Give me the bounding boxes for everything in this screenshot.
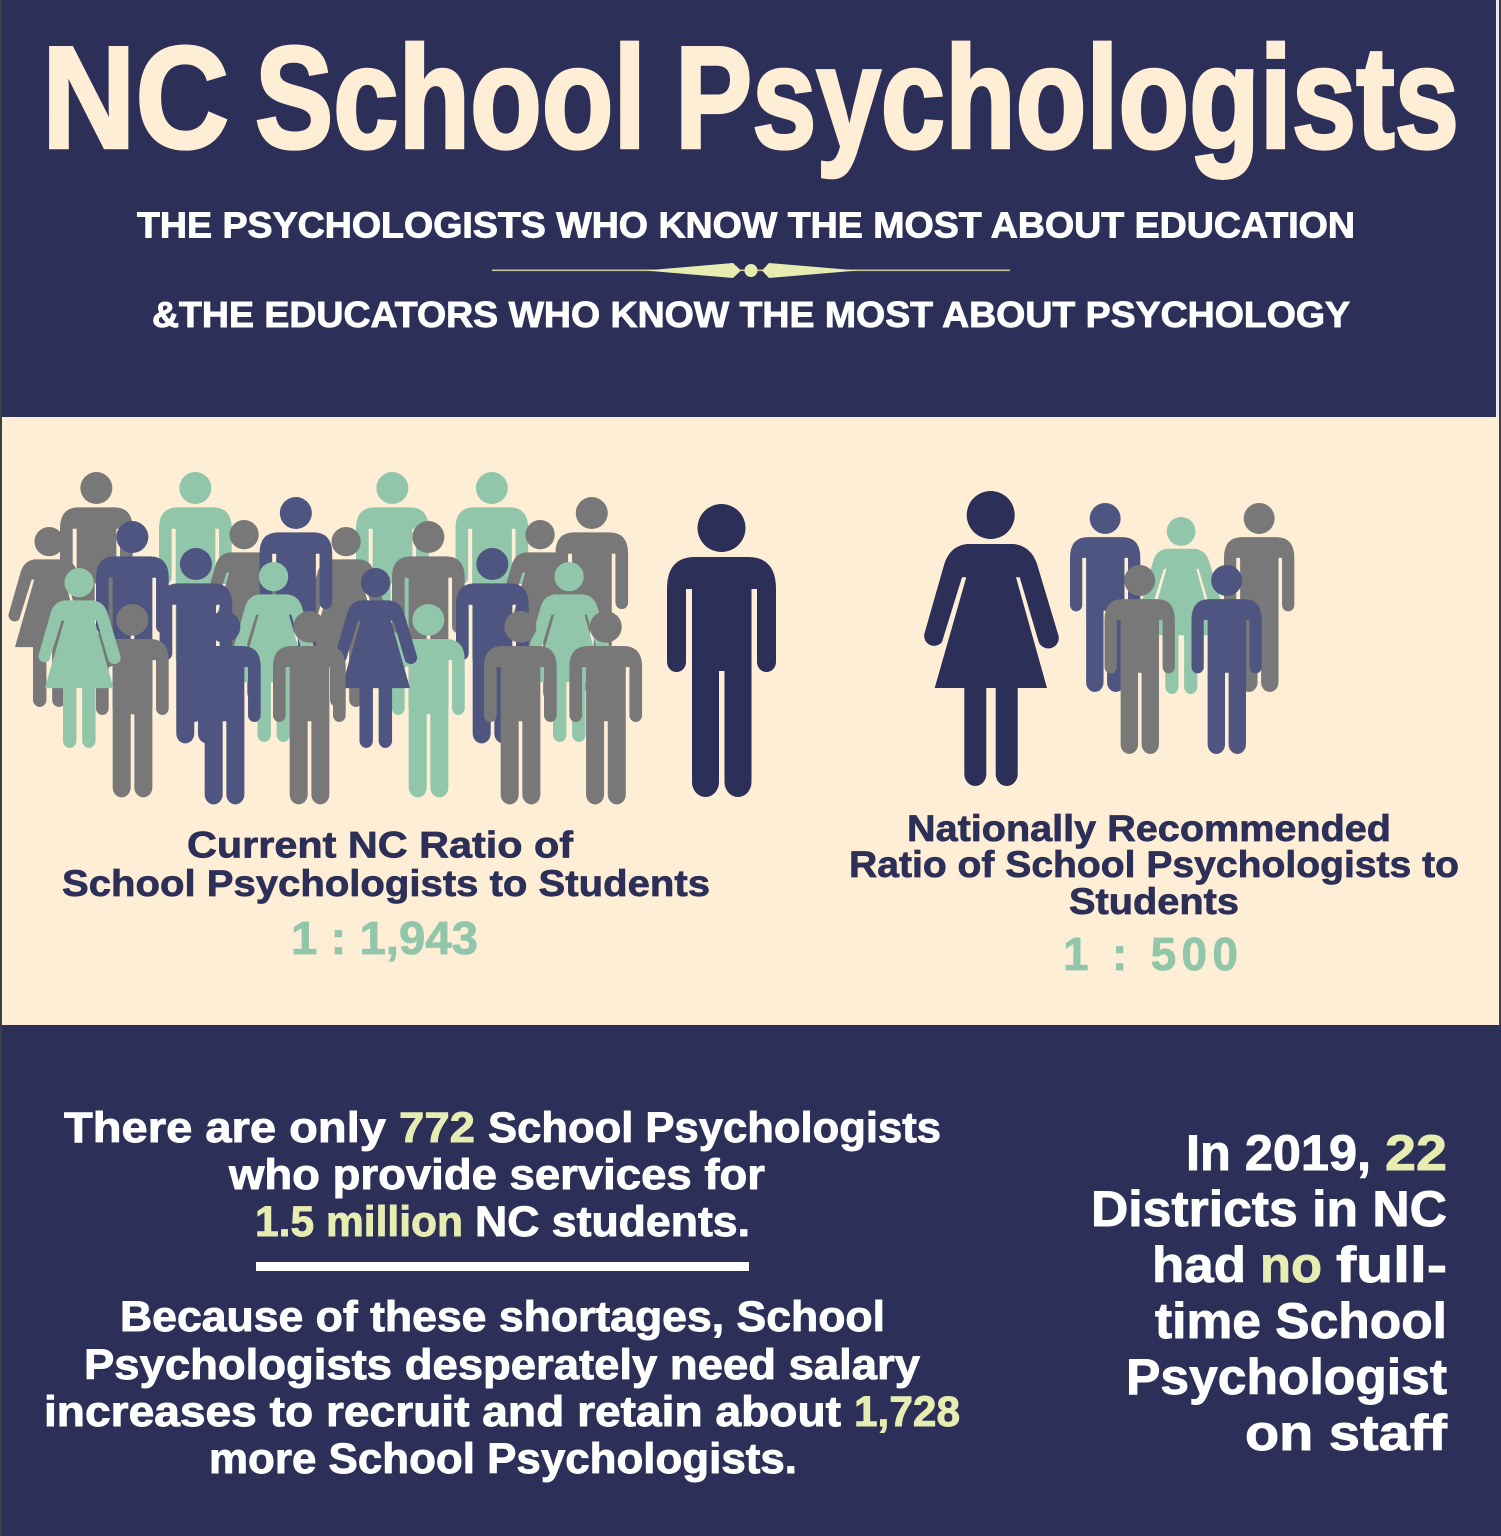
text block: salary need: more School Psychologists. — [209, 1435, 797, 1483]
panel: ratio comparison background — [0, 417, 1499, 1025]
title: School — [255, 16, 646, 178]
text block: psychologist count: NC students. — [475, 1198, 750, 1246]
ornamental divider — [492, 263, 1010, 278]
heading: nationally recommended ratio: Ratio of School Psychologists to — [849, 844, 1459, 885]
text block: psychologist count: 1.5 million — [255, 1198, 463, 1246]
panel: statistics background — [0, 1025, 1501, 1536]
title — [42, 16, 1459, 178]
text block: psychologist count: 772 — [399, 1104, 475, 1152]
text block: districts without staff: In 2019, — [1186, 1125, 1371, 1181]
text block: salary need: Psychologists desperately need salary — [84, 1341, 920, 1389]
text block: districts without staff — [1091, 1125, 1447, 1461]
stat: current ratio: 1 : 1,943 — [291, 912, 478, 964]
text block: districts without staff: time School — [1155, 1293, 1447, 1349]
text block: psychologist count — [64, 1104, 941, 1246]
stat: recommended ratio: 1 : 500 — [1063, 928, 1238, 980]
heading: current NC ratio: Current NC Ratio of — [187, 824, 574, 866]
heading: current NC ratio — [62, 824, 710, 904]
text block: psychologist count: School Psychologists — [488, 1104, 941, 1152]
text block: salary need: 1,728 — [854, 1388, 960, 1436]
text block: psychologist count: There are only — [64, 1104, 386, 1152]
icon: crowd of students, current NC ratio — [8, 472, 642, 804]
subtitle line two: &THE EDUCATORS WHO KNOW THE MOST ABOUT PSYCHOLOGY — [152, 294, 1350, 335]
icon: single school psychologist, current ratio — [667, 504, 776, 797]
heading: current NC ratio: School Psychologists to Students — [62, 863, 710, 904]
heading: nationally recommended ratio: Students — [1069, 881, 1239, 922]
heading: nationally recommended ratio: Nationally Recommended — [907, 808, 1391, 849]
text block: districts without staff: Psychologist — [1126, 1349, 1447, 1405]
text block: salary need — [44, 1293, 960, 1483]
text block: districts without staff: no — [1260, 1237, 1322, 1293]
heading: nationally recommended ratio — [849, 808, 1459, 922]
icon: small group of students, recommended ratio — [1070, 503, 1294, 754]
text block: districts without staff: 22 — [1385, 1125, 1447, 1181]
text block: districts without staff: on staff — [1245, 1405, 1447, 1461]
panel: header background — [0, 0, 1501, 418]
text block: salary need: Because of these shortages, School — [120, 1293, 885, 1341]
text block: districts without staff: full- — [1336, 1237, 1447, 1293]
subtitle line one: THE PSYCHOLOGISTS WHO KNOW THE MOST ABOUT EDUCATION — [137, 204, 1355, 246]
title: NC — [42, 16, 229, 178]
text block: districts without staff: had — [1152, 1237, 1246, 1293]
icon: single school psychologist, recommended ratio — [924, 491, 1059, 786]
text block: salary need: increases to recruit and retain about — [44, 1388, 841, 1436]
text block: psychologist count: who provide services for — [228, 1151, 765, 1199]
text block: districts without staff: Districts in NC — [1091, 1181, 1447, 1237]
